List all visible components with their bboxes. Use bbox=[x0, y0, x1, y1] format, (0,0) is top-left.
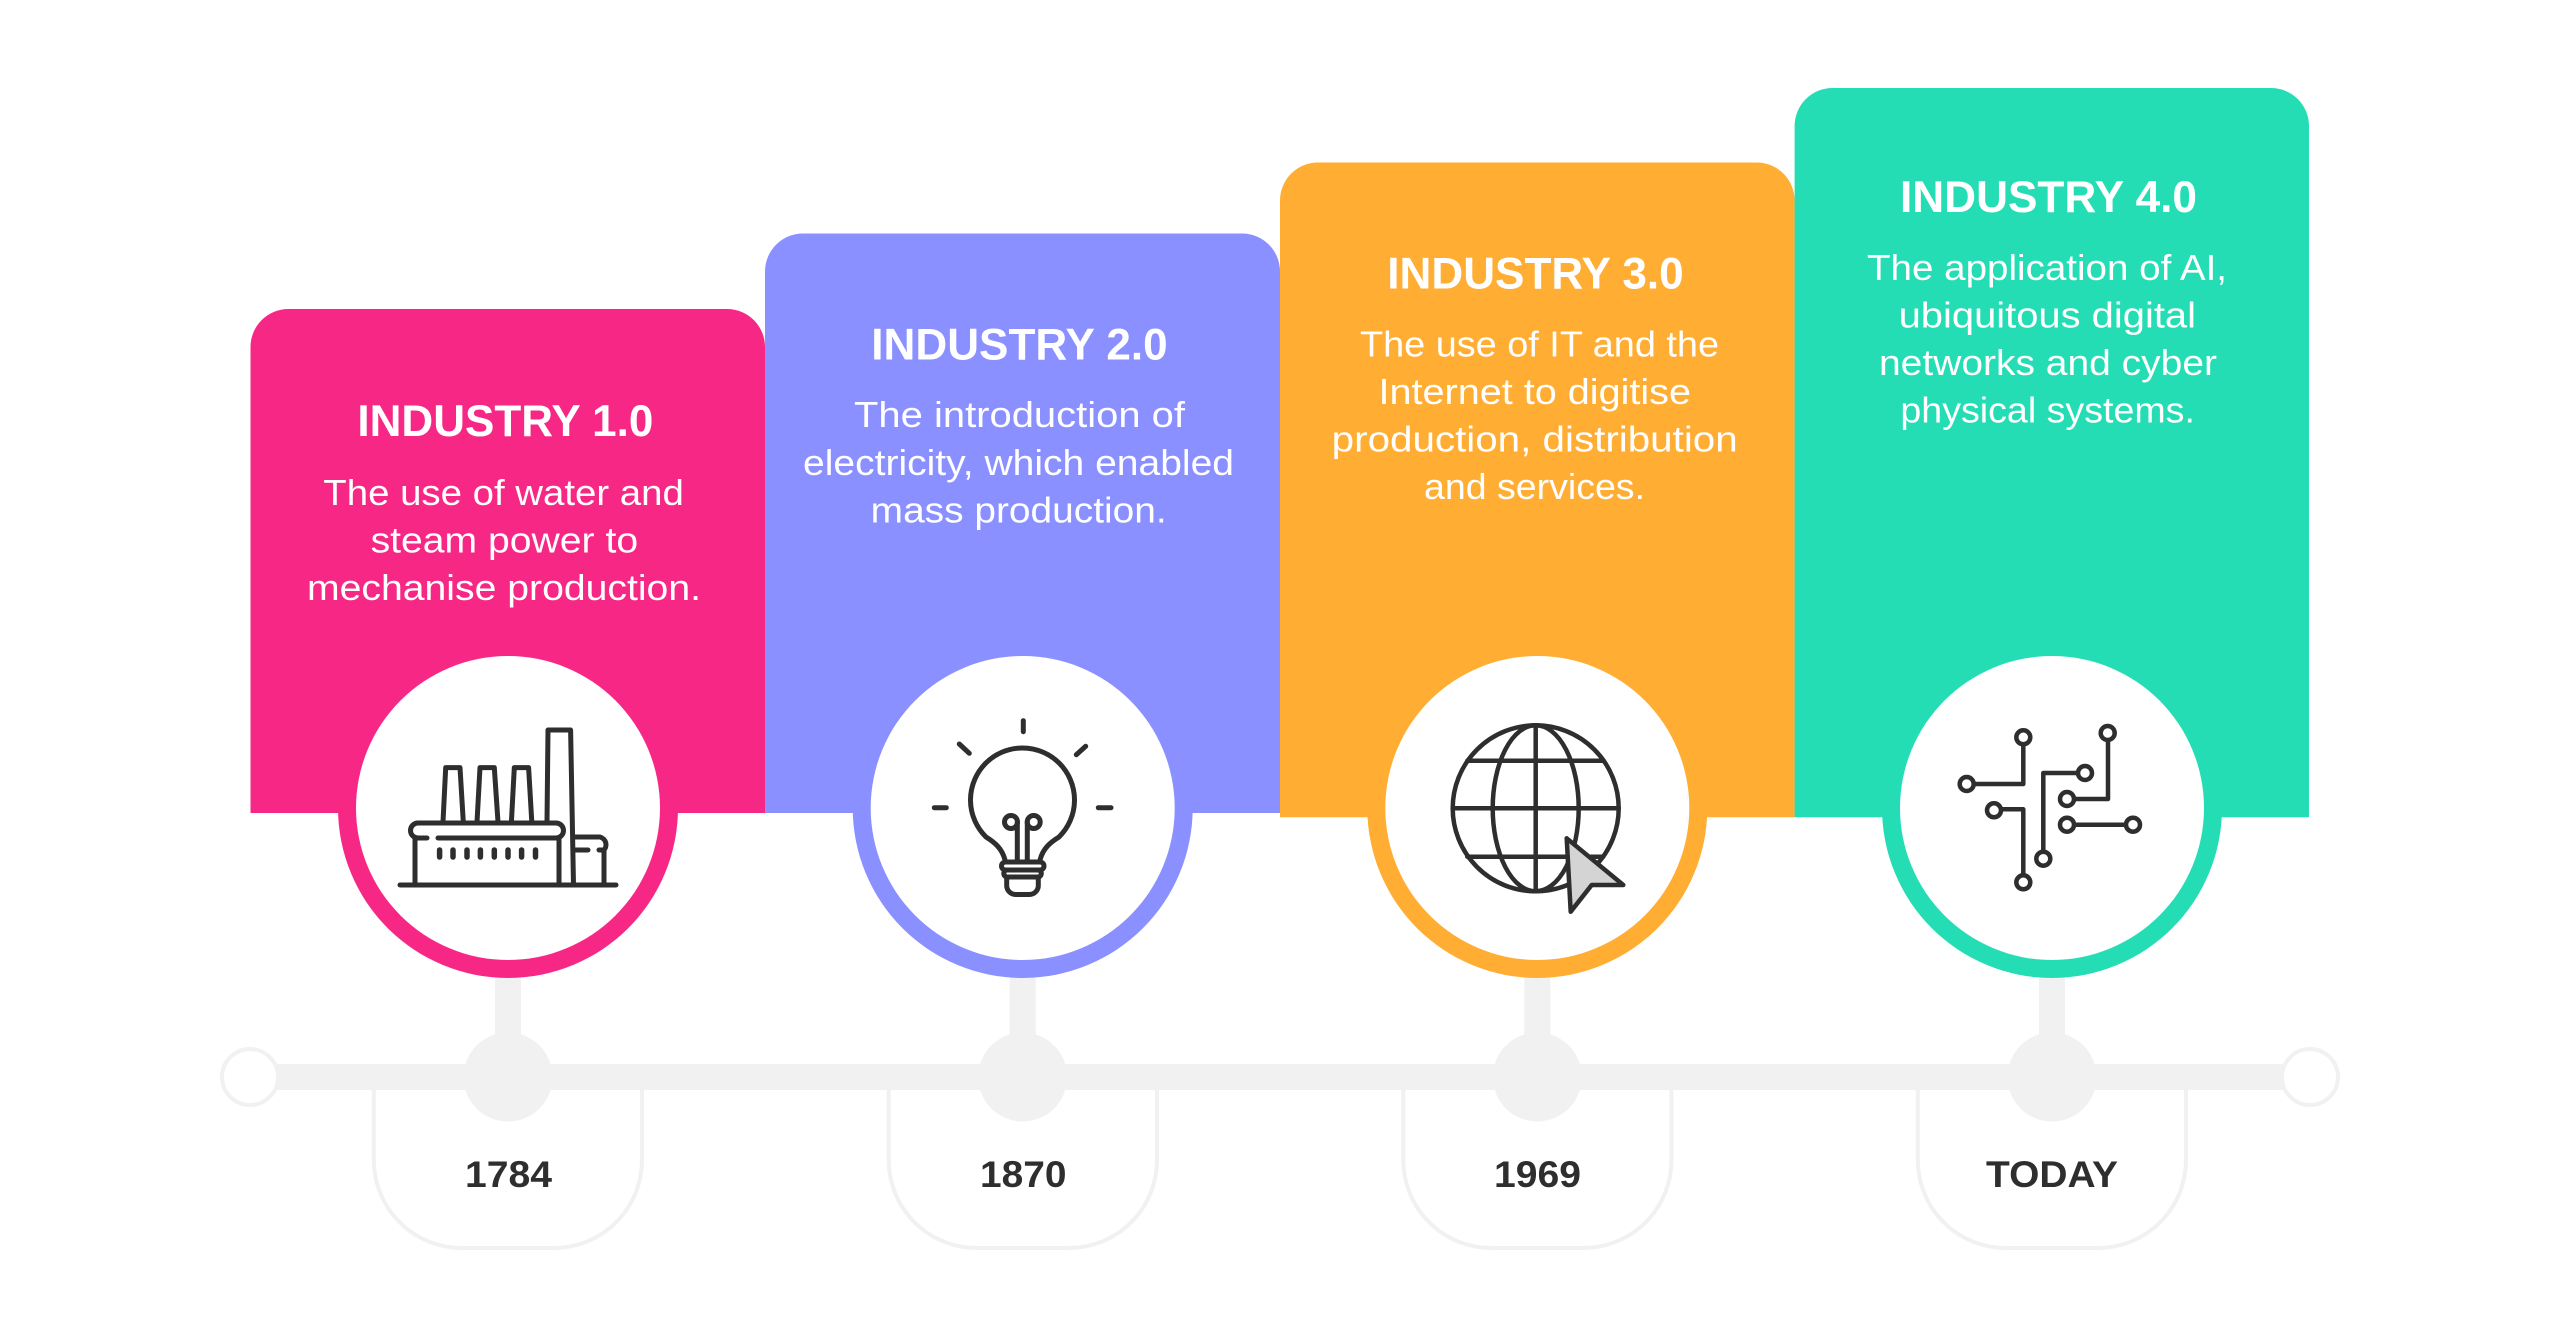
year panel: today: TODAY bbox=[1986, 1154, 2118, 1195]
description: steam power to bbox=[371, 520, 638, 560]
icon: factory bbox=[400, 730, 616, 885]
icon: globe with cursor bbox=[1453, 725, 1623, 912]
description: electricity, which enabled bbox=[803, 442, 1234, 483]
description: mass production. bbox=[871, 490, 1167, 530]
year panel: 1969: 1969 bbox=[1494, 1154, 1581, 1195]
timeline end cap bbox=[2282, 1049, 2338, 1105]
description bbox=[307, 472, 701, 608]
timeline bar bbox=[270, 1064, 2290, 1090]
description: networks and cyber bbox=[1879, 342, 2217, 383]
description: production, distribution bbox=[1332, 418, 1738, 460]
icon ring bbox=[1882, 638, 2222, 978]
description: physical systems. bbox=[1900, 390, 2195, 430]
description bbox=[1867, 247, 2227, 430]
timeline node: 1784 bbox=[464, 970, 552, 1122]
description: Internet to digitise bbox=[1378, 371, 1691, 412]
heading: INDUSTRY 3.0 bbox=[1387, 250, 1684, 299]
year panel: 1870: 1870 bbox=[980, 1154, 1066, 1195]
timeline bbox=[222, 970, 2338, 1248]
description bbox=[803, 394, 1234, 530]
description: The introduction of bbox=[854, 394, 1186, 435]
description: The application of AI, bbox=[1867, 247, 2227, 288]
timeline start cap bbox=[222, 1049, 278, 1105]
panel: industry 1.0 bbox=[250, 309, 765, 978]
year panel: 1784 bbox=[374, 1085, 642, 1248]
heading: INDUSTRY 2.0 bbox=[871, 320, 1168, 369]
description: The use of IT and the bbox=[1360, 324, 1719, 364]
icon: light bulb bbox=[934, 721, 1111, 894]
timeline node: 1969 bbox=[1493, 970, 1582, 1122]
description: The use of water and bbox=[323, 472, 684, 513]
card background bbox=[250, 309, 765, 813]
heading: INDUSTRY 1.0 bbox=[357, 397, 653, 446]
heading: INDUSTRY 4.0 bbox=[1900, 173, 2197, 222]
panel: industry 3.0 bbox=[1280, 162, 1795, 978]
panel: industry 2.0 bbox=[765, 234, 1280, 978]
icon: circuit bbox=[1960, 726, 2140, 889]
timeline node: 1870 bbox=[978, 970, 1067, 1122]
description: mechanise production. bbox=[307, 567, 701, 608]
timeline node: today bbox=[2008, 970, 2096, 1122]
card background bbox=[1795, 88, 2309, 817]
description: ubiquitous digital bbox=[1899, 294, 2196, 336]
description: and services. bbox=[1424, 466, 1645, 507]
icon ring bbox=[1367, 638, 1707, 978]
year panel: today bbox=[1918, 1085, 2186, 1248]
year panel: 1870 bbox=[889, 1085, 1157, 1248]
year panel: 1969 bbox=[1403, 1085, 1672, 1248]
description bbox=[1332, 324, 1738, 507]
year panel: 1784: 1784 bbox=[465, 1154, 552, 1195]
icon ring bbox=[853, 638, 1193, 978]
card background bbox=[765, 234, 1280, 813]
card background bbox=[1280, 162, 1795, 817]
panel: industry 4.0 bbox=[1795, 88, 2309, 978]
icon ring bbox=[338, 638, 678, 978]
